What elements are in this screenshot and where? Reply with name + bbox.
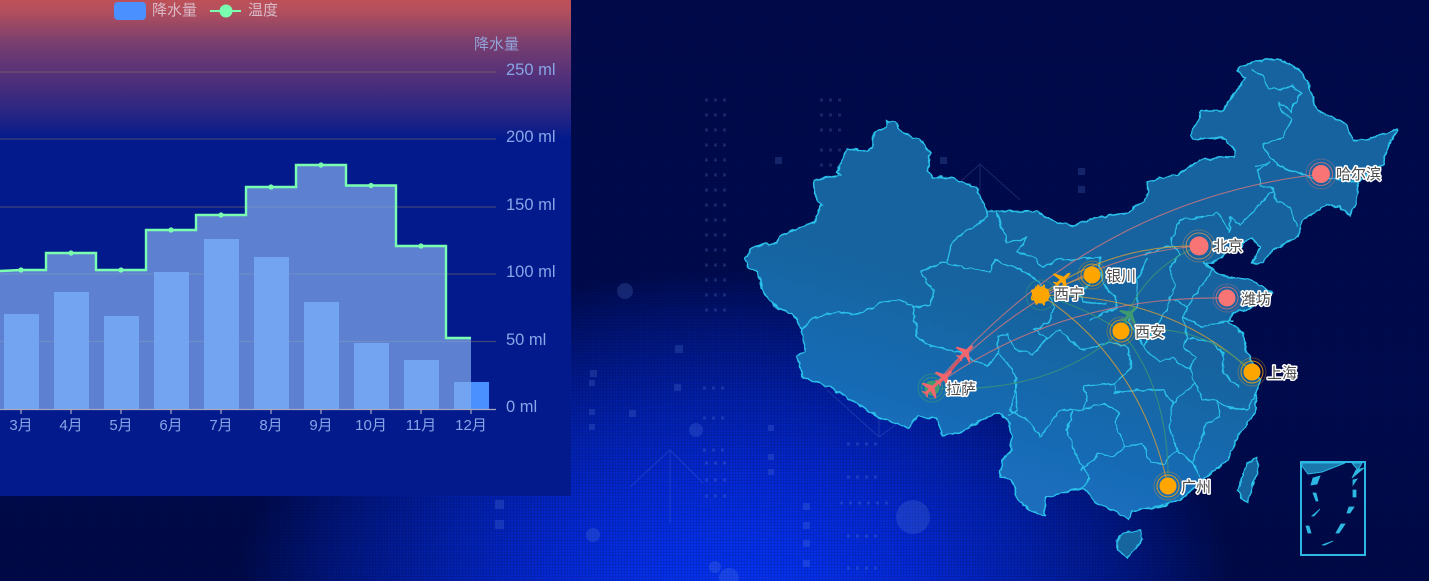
plane: green near 西安 <box>1116 300 1144 328</box>
panel: rainfall chart <box>0 0 571 496</box>
y axis labels: 250 ml <box>506 61 556 79</box>
Taiwan <box>1238 458 1257 503</box>
legend: 温度 <box>248 2 278 19</box>
x axis: 11月 <box>406 417 436 434</box>
y axis labels <box>506 61 556 416</box>
y axis name: 降水量 <box>474 36 519 53</box>
city markers <box>918 159 1336 500</box>
city labels: 上海 <box>1267 365 1297 382</box>
x axis: 3月 <box>9 417 33 434</box>
city labels: 西宁 <box>1054 286 1084 303</box>
step area: temperature <box>0 165 471 409</box>
marker: 广州 <box>1154 472 1182 500</box>
y axis labels: 0 ml <box>506 398 537 416</box>
city labels: 西安 <box>1135 324 1165 341</box>
legend: 降水量 <box>152 2 197 19</box>
y axis labels: 100 ml <box>506 263 556 281</box>
map of China <box>745 58 1397 558</box>
marker: 北京 <box>1183 230 1215 262</box>
city labels <box>946 166 1381 496</box>
city labels: 广州 <box>1181 479 1211 496</box>
x axis: 12月 <box>455 417 487 434</box>
bar chart: rainfall <box>4 239 489 409</box>
city labels: 拉萨 <box>946 381 976 398</box>
x axis: 4月 <box>59 417 83 434</box>
y axis labels: 50 ml <box>506 331 546 349</box>
mainland outline <box>745 58 1397 520</box>
mainland and borders <box>745 58 1397 558</box>
marker: 上海 <box>1238 358 1266 386</box>
marker: 潍坊 <box>1213 284 1241 312</box>
plane: orange over 西宁 <box>1027 265 1077 309</box>
inset: South China Sea <box>1301 462 1365 555</box>
city labels: 银川 <box>1106 268 1136 285</box>
x axis: 6月 <box>159 417 183 434</box>
marker: 哈尔滨 <box>1306 159 1336 189</box>
province borders <box>792 70 1357 488</box>
x axis <box>0 409 496 434</box>
panel background <box>0 0 571 496</box>
planes <box>918 265 1144 402</box>
x axis: 9月 <box>309 417 333 434</box>
background circuit decoration <box>495 157 1085 581</box>
marker: 西安 <box>1107 317 1135 345</box>
step line: temperature <box>0 165 471 338</box>
y axis labels: 200 ml <box>506 128 556 146</box>
marker: 拉萨 <box>918 374 946 402</box>
city labels: 潍坊 <box>1241 291 1271 308</box>
flight lines <box>932 174 1321 486</box>
x axis: 7月 <box>209 417 233 434</box>
Hainan <box>1117 530 1142 558</box>
y axis labels: 150 ml <box>506 196 556 214</box>
city labels: 哈尔滨 <box>1336 166 1381 183</box>
marker: 银川 <box>1078 261 1106 289</box>
plane: pink towards 拉萨 <box>918 338 980 402</box>
x axis: 10月 <box>355 417 387 434</box>
marker: 西宁 <box>1026 280 1056 310</box>
x axis: 8月 <box>259 417 283 434</box>
legend <box>114 2 278 20</box>
x axis: 5月 <box>109 417 133 434</box>
city labels: 北京 <box>1213 238 1243 255</box>
